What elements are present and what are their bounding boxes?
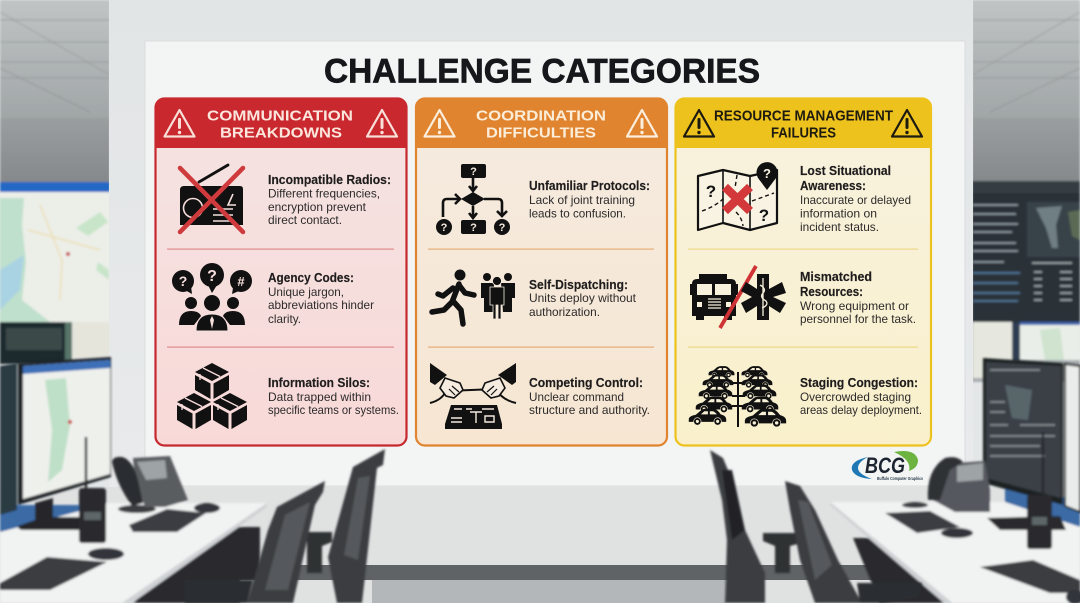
text: information silos: Information Silos:	[268, 376, 370, 390]
icon: people with question bubbles: #	[237, 274, 245, 289]
header title: resource management failures: FAILURES	[771, 126, 836, 142]
logo: BCG: BCG	[865, 453, 905, 478]
text: unfamiliar protocols: leads to confusion.	[529, 206, 626, 220]
icon: map with red cross: ?	[759, 206, 769, 225]
text: incompatible radios: Incompatible Radios:	[268, 173, 391, 187]
text: self-dispatching: Self-Dispatching:	[529, 278, 628, 292]
panel: coordination difficulties	[415, 98, 667, 446]
text: mismatched resources: Resources:	[800, 285, 863, 299]
icon: warning left	[684, 110, 714, 136]
panel: communication breakdowns	[155, 98, 407, 446]
text: agency codes	[268, 271, 374, 326]
background: control room left side	[0, 0, 110, 364]
icon: people with question bubbles: ?	[179, 273, 187, 289]
text: incompatible radios	[268, 173, 391, 227]
text: competing control: Competing Control:	[529, 376, 643, 390]
header title: coordination difficulties: COORDINATION	[476, 108, 606, 124]
icon: confusing flowchart: ?	[470, 222, 477, 234]
logo: BCG	[852, 451, 923, 481]
header title: resource management failures	[714, 108, 893, 142]
header title: resource management failures: RESOURCE MANAGEMENT	[714, 108, 893, 124]
icon: congested parked cars	[689, 366, 786, 427]
background: control room right side	[972, 0, 1080, 382]
right desk workstation	[830, 358, 1080, 603]
icon: runner leaving a group	[432, 270, 515, 324]
icon: fire truck versus star of life	[690, 266, 786, 328]
header title: communication breakdowns	[207, 108, 353, 142]
icon: confusing flowchart: ?	[470, 166, 477, 178]
text: agency codes: clarity.	[268, 312, 301, 326]
text: staging congestion	[800, 376, 922, 417]
right office chairs	[710, 450, 922, 603]
header title: communication breakdowns: BREAKDOWNS	[220, 126, 342, 142]
text: competing control: Unclear command	[529, 390, 624, 404]
text: lost situational awareness: Inaccurate or delayed	[800, 193, 911, 207]
header band: coordination difficulties	[415, 98, 667, 148]
icon: map with red cross	[698, 162, 778, 230]
logo: BCG: Buffalo Computer Graphics	[877, 476, 923, 481]
text: self-dispatching	[529, 278, 637, 319]
lower wall and floor	[0, 487, 1080, 603]
text: mismatched resources: Mismatched	[800, 270, 872, 284]
header band: resource management failures	[675, 98, 932, 148]
text: unfamiliar protocols: Unfamiliar Protocols:	[529, 179, 650, 193]
icon: stacked boxes	[177, 363, 247, 429]
header title: communication breakdowns: COMMUNICATION	[207, 108, 353, 124]
icon: confusing flowchart: ?	[441, 222, 448, 234]
text: staging congestion: Staging Congestion:	[800, 376, 918, 390]
icon: people with question bubbles: ?	[207, 268, 217, 285]
text: lost situational awareness: information on	[800, 206, 877, 220]
header title: coordination difficulties: DIFFICULTIES	[486, 126, 596, 142]
text: information silos	[268, 376, 399, 417]
text: lost situational awareness: incident status.	[800, 220, 879, 234]
text: agency codes: abbreviations hinder	[268, 298, 374, 312]
text: information silos: Data trapped within	[268, 390, 371, 404]
text: lost situational awareness: Lost Situational	[800, 164, 891, 178]
icon: warning right	[892, 110, 922, 136]
icon: map with red cross: ?	[763, 166, 771, 181]
icon: crossed-out radio	[180, 165, 243, 232]
text: unfamiliar protocols	[529, 179, 650, 220]
text: agency codes: Agency Codes:	[268, 271, 354, 285]
icon: map with red cross: ?	[706, 182, 716, 201]
header title: coordination difficulties	[476, 108, 606, 142]
text: staging congestion: areas delay deployment.	[800, 403, 922, 417]
text: information silos: specific teams or systems.	[268, 403, 399, 417]
left desk workstation	[0, 357, 267, 603]
icon: warning right	[367, 110, 397, 136]
text: mismatched resources	[800, 270, 916, 326]
title: CHALLENGE CATEGORIES	[324, 52, 760, 90]
text: staging congestion: Overcrowded staging	[800, 390, 911, 404]
text: incompatible radios: Different frequencies,	[268, 186, 380, 200]
text: competing control	[529, 376, 650, 417]
icon: warning left	[424, 110, 454, 136]
text: lost situational awareness	[800, 164, 911, 234]
text: agency codes: Unique jargon,	[268, 285, 344, 299]
icon: warning left	[164, 110, 194, 136]
text: incompatible radios: encryption prevent	[268, 200, 367, 214]
text: lost situational awareness: Awareness:	[800, 179, 866, 193]
text: incompatible radios: direct contact.	[268, 213, 342, 227]
poster board	[145, 41, 965, 486]
icon: tug of war over a control console	[430, 363, 516, 429]
icon: confusing flowchart	[436, 164, 510, 235]
wall panel	[109, 0, 973, 565]
icon: warning right	[627, 110, 657, 136]
icon: people with question bubbles	[172, 263, 252, 331]
text: unfamiliar protocols: Lack of joint training	[529, 193, 635, 207]
panel: resource management failures	[675, 98, 932, 446]
text: mismatched resources: personnel for the task.	[800, 312, 916, 326]
header band: communication breakdowns	[155, 98, 407, 148]
text: self-dispatching: authorization.	[529, 305, 600, 319]
icon: confusing flowchart: ?	[499, 222, 506, 234]
text: competing control: structure and authority.	[529, 403, 650, 417]
text: mismatched resources: Wrong equipment or	[800, 299, 909, 313]
text: self-dispatching: Units deploy without	[529, 291, 637, 305]
left office chairs	[185, 449, 385, 603]
